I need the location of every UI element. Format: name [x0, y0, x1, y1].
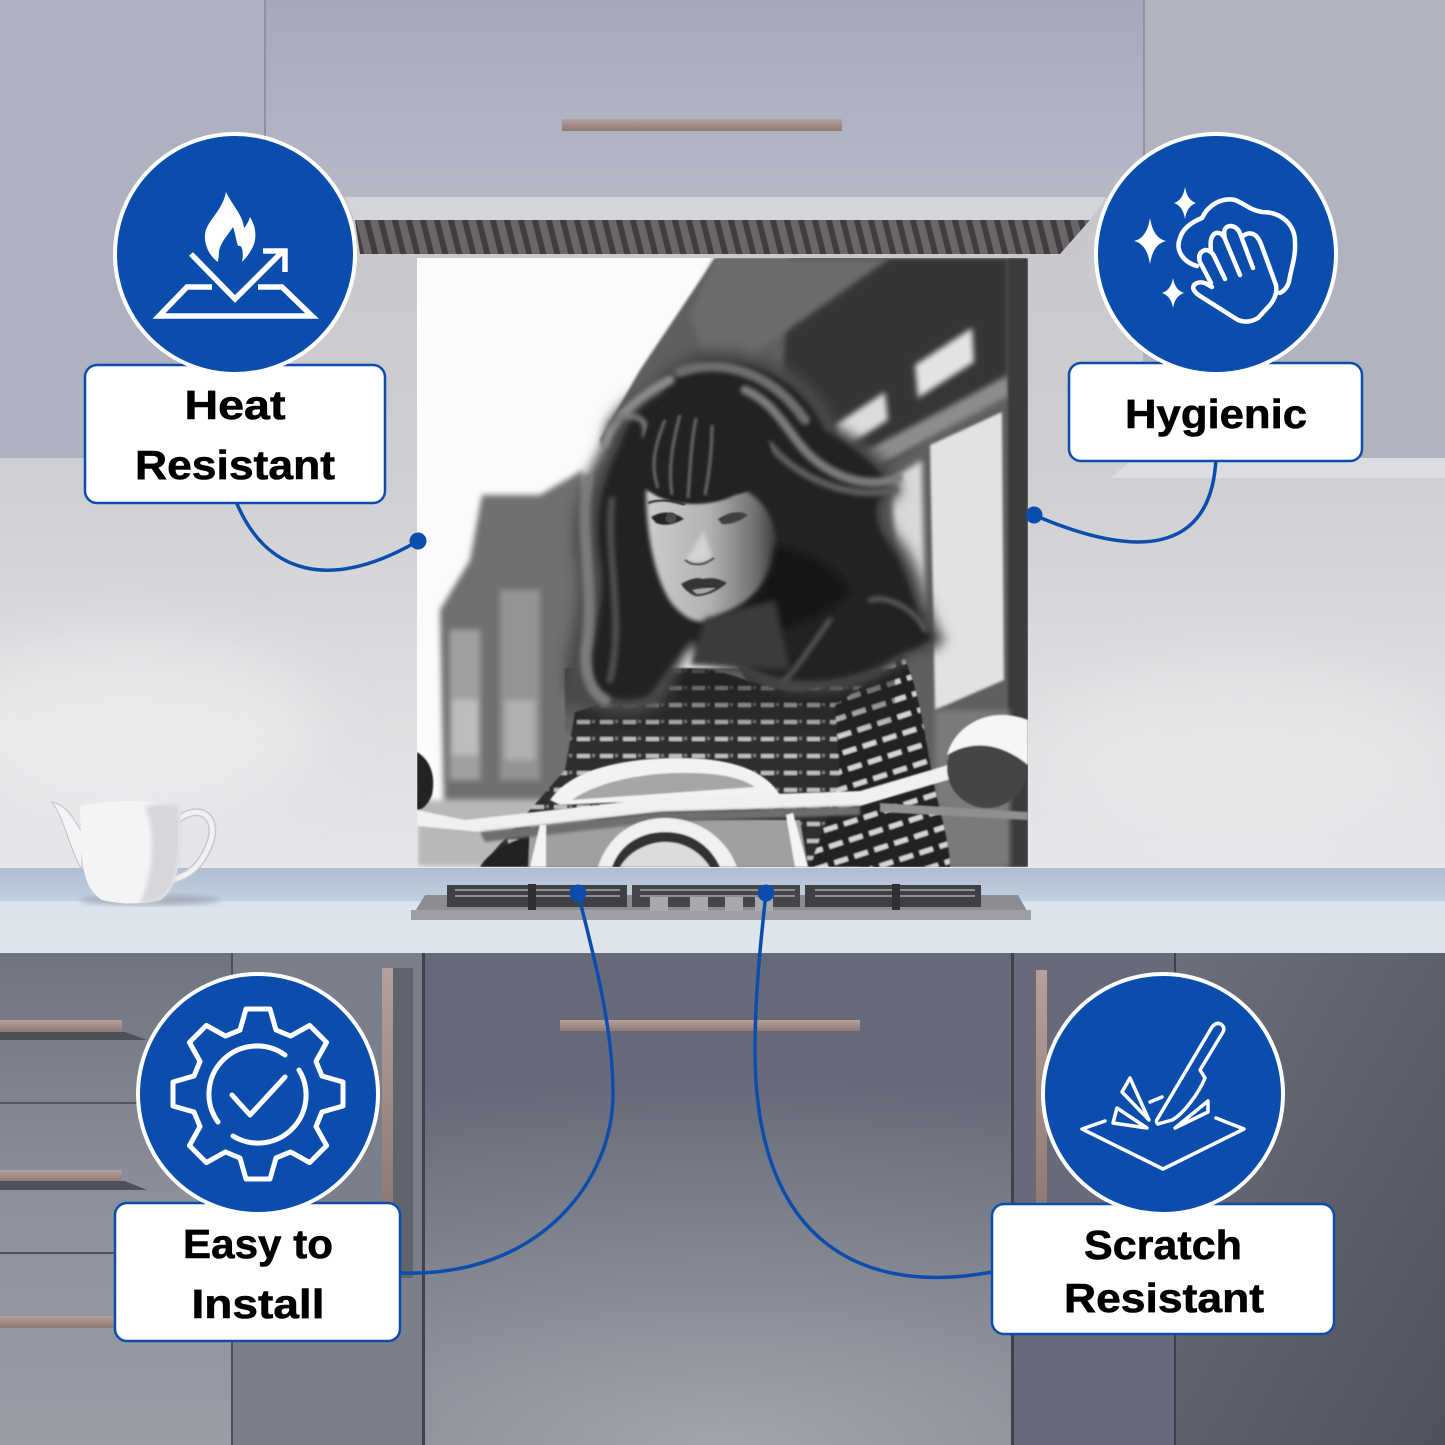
label box: [1069, 363, 1362, 461]
artwork panel: woman on scooter: [417, 258, 1028, 867]
face: [646, 486, 850, 670]
callout: heat resistant: [85, 134, 385, 503]
upper cabinets: [0, 0, 1445, 478]
label box: Resistant: [135, 442, 335, 488]
label box: Easy to: [183, 1221, 333, 1267]
nose: [686, 530, 712, 563]
hair highlights: [585, 367, 925, 700]
label box: Scratch: [1084, 1222, 1242, 1268]
callout: hygienic: [1069, 134, 1362, 461]
callout: easy to install: [115, 974, 400, 1341]
callout: scratch resistant: [992, 974, 1334, 1334]
label box: Hygienic: [1125, 391, 1307, 437]
label box: [115, 1203, 400, 1341]
eyes and brows: [651, 512, 684, 525]
scooter: [417, 715, 1028, 867]
label box: [992, 1204, 1334, 1334]
countertop: [0, 868, 1445, 953]
hair: [564, 349, 945, 713]
fringe: [641, 402, 771, 504]
label box: [85, 365, 385, 503]
label box: Install: [192, 1281, 324, 1327]
lower cabinets: [0, 952, 1445, 1445]
label box: Resistant: [1064, 1275, 1264, 1321]
connector: easy to install: [400, 884, 613, 1273]
gas hob: [411, 884, 1031, 920]
icon: hand wiping with sparkles: [1096, 134, 1336, 374]
teapot: [52, 801, 220, 905]
icon: gear with check: [138, 974, 378, 1214]
sweater: [480, 640, 950, 867]
cooker hood: [345, 197, 1105, 256]
icon: knife scratching surface: [1043, 974, 1283, 1214]
connector: scratch resistant: [755, 884, 992, 1277]
lips: [681, 578, 727, 596]
connector: hygienic: [1026, 458, 1216, 542]
icon: flame on surface: [115, 134, 355, 374]
connector: heat resistant: [235, 499, 426, 570]
left building: [417, 470, 610, 867]
label box: Heat: [184, 382, 286, 428]
right building: [600, 258, 1028, 867]
